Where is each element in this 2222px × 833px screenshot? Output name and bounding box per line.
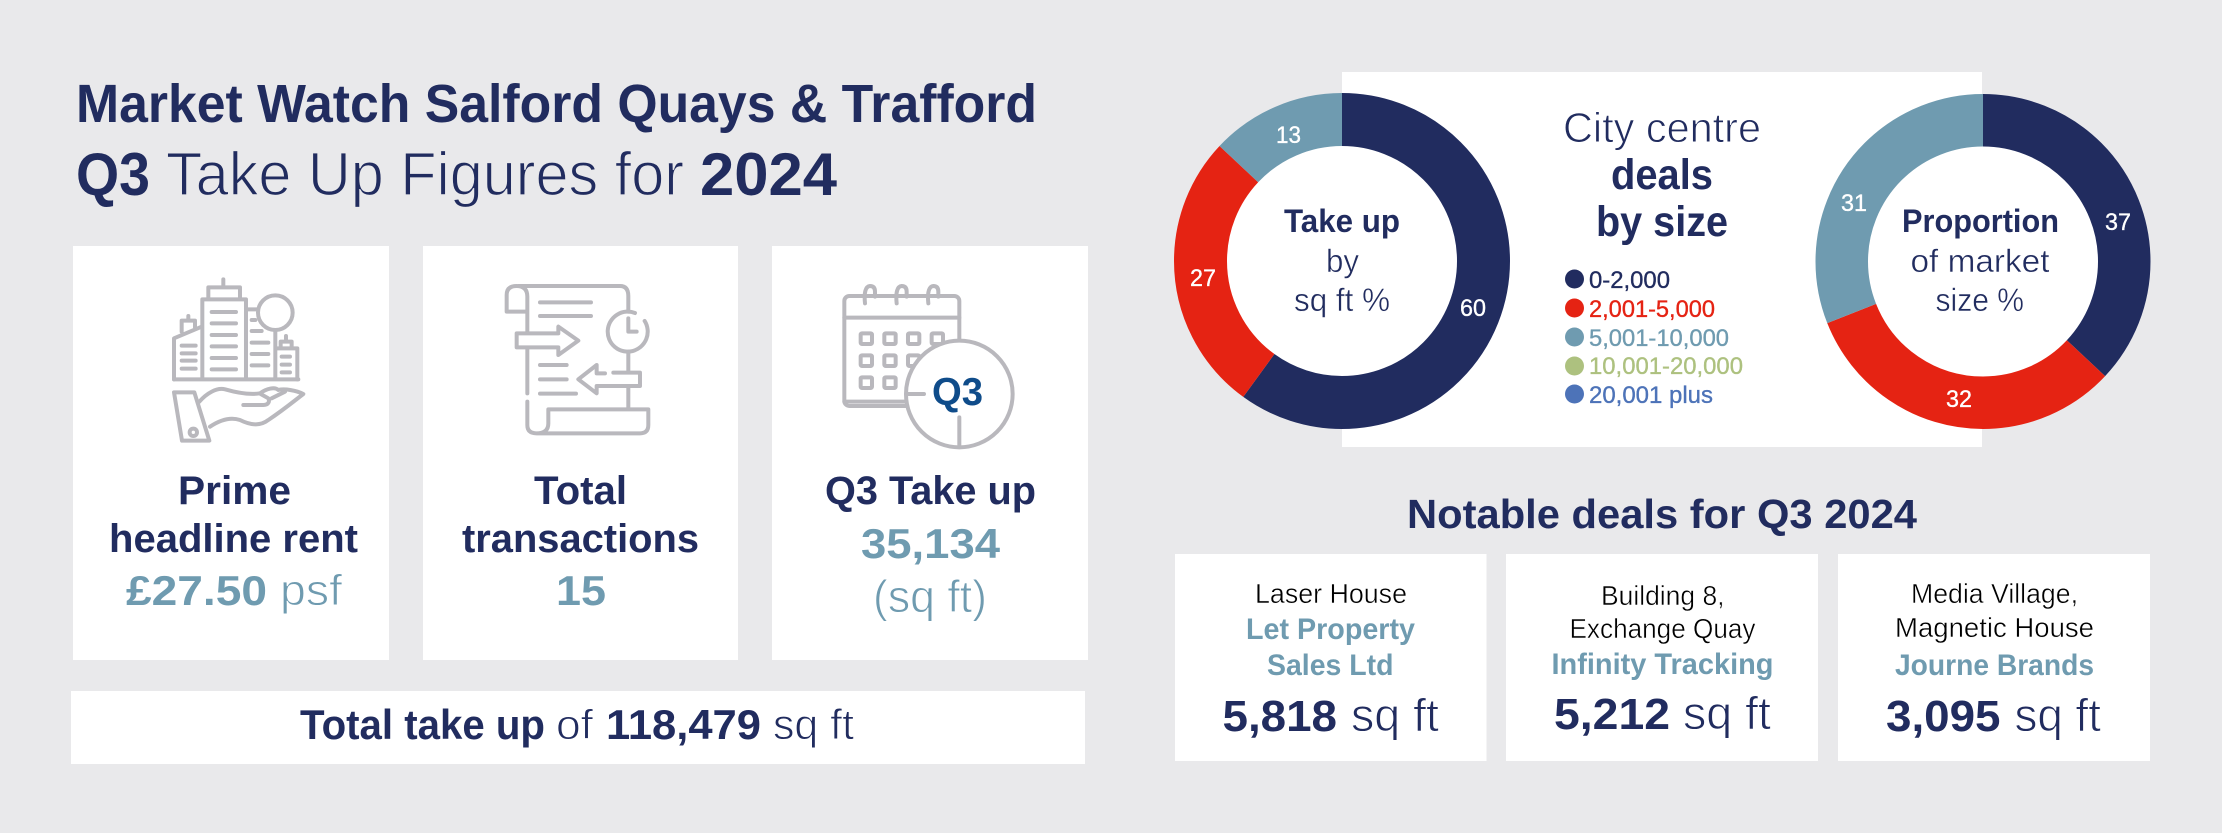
- total take up text: [300, 701, 854, 749]
- donut centre label: by: [1326, 243, 1359, 279]
- size: [1222, 689, 1439, 741]
- legend: 2,001-5,000: [1589, 296, 1715, 323]
- title: [76, 74, 1037, 208]
- value: £27.50 psf: psf: [280, 566, 343, 615]
- title line 2: Take Up Figures for: [166, 140, 684, 208]
- size: 5,212: [1554, 690, 1670, 739]
- donut centre label: of market: [1910, 243, 2050, 279]
- property name: Exchange Quay: [1570, 613, 1756, 644]
- tenant: Let Property: [1246, 613, 1415, 646]
- property name: [1570, 580, 1756, 644]
- size: sq ft: [2014, 689, 2101, 741]
- donut centre label: [1284, 203, 1400, 318]
- icon: calendar with Q3 clock: [844, 286, 1013, 447]
- title line 2: Q3: [76, 141, 150, 208]
- legend: 10,001-20,000: [1589, 353, 1743, 380]
- donut values: 60: [1460, 295, 1486, 322]
- label: prime headline rent: [109, 469, 358, 561]
- label: prime headline rent: headline rent: [109, 517, 358, 561]
- donut centre label: sq ft %: [1294, 282, 1390, 318]
- tenant: Infinity Tracking: [1552, 648, 1774, 681]
- value: 35,134 sq ft: 35,134: [861, 520, 1001, 567]
- size: [1554, 687, 1771, 739]
- donut values: 27: [1190, 265, 1216, 292]
- label: total transactions: [462, 469, 699, 561]
- donut chart: proportion of market size: [1841, 120, 2131, 413]
- heading: city centre deals by size: City centre: [1563, 104, 1761, 151]
- donut chart: take up by sq ft: [1190, 120, 1486, 402]
- panel: Q3 take up: [772, 246, 1088, 660]
- total take up text: 118,479: [606, 701, 761, 748]
- icon: city on a hand: [174, 279, 303, 441]
- deal card: Building 8, Exchange Quay: [1506, 554, 1818, 761]
- value: 35,134 sq ft: (sq ft): [873, 571, 987, 622]
- donut centre label: [1902, 203, 2059, 318]
- legend: 0-2,000: [1589, 267, 1670, 294]
- tenant: Journe Brands: [1895, 649, 2094, 682]
- total take up text: Total take up: [300, 701, 545, 748]
- property name: Laser House: [1255, 578, 1407, 609]
- tenant: [1246, 613, 1415, 682]
- deal card: Media Village, Magnetic House: [1838, 554, 2150, 761]
- total take up text: sq ft: [773, 701, 854, 749]
- donut centre label: size %: [1936, 282, 2024, 318]
- legend: 5,001-10,000: [1589, 325, 1729, 352]
- property name: [1895, 578, 2094, 643]
- donut values: [1841, 190, 2131, 413]
- heading: city centre deals by size: by size: [1596, 198, 1728, 246]
- property name: Media Village,: [1911, 578, 2078, 609]
- title line 2: 2024: [700, 141, 838, 208]
- size: [1886, 689, 2101, 741]
- panel: prime headline rent: [73, 246, 389, 660]
- heading: city centre deals by size: deals: [1611, 151, 1713, 199]
- property name: Building 8,: [1601, 580, 1724, 611]
- donut centre label: Take up: [1284, 203, 1400, 239]
- total take up text: of: [556, 701, 593, 748]
- size: 5,818: [1222, 692, 1337, 741]
- donut values: [1190, 122, 1486, 322]
- size: sq ft: [1351, 689, 1439, 741]
- label: total transactions: Total: [534, 469, 627, 513]
- donut values: 32: [1946, 386, 1972, 413]
- donut values: 13: [1276, 122, 1301, 149]
- size: sq ft: [1683, 687, 1771, 739]
- donut centre label: Proportion: [1902, 203, 2059, 239]
- deal card: Laser House: [1175, 554, 1486, 761]
- value: 35,134 sq ft: [861, 520, 1001, 622]
- label: total transactions: transactions: [462, 517, 699, 561]
- tenant: Sales Ltd: [1267, 649, 1394, 682]
- value: £27.50 psf: £27.50: [126, 567, 267, 614]
- donut values: 37: [2105, 209, 2131, 236]
- donut values: 31: [1841, 190, 1867, 217]
- title line 2: [76, 140, 838, 208]
- panel: city centre deals by size: [1342, 72, 1982, 447]
- icon: calendar with Q3 clock: Q3: [932, 371, 983, 414]
- value: 15: 15: [556, 567, 606, 614]
- heading: notable deals: Notable deals for Q3 2024: [1407, 491, 1917, 537]
- title line 1: Market Watch Salford Quays & Trafford: [76, 74, 1037, 134]
- panel: total transactions: [423, 246, 738, 660]
- panel: total take up bar: [71, 691, 1085, 764]
- legend: 20,001 plus: [1589, 382, 1713, 409]
- size: 3,095: [1886, 692, 2000, 741]
- label: Q3 take up: Q3 Take up: [825, 469, 1036, 513]
- heading: city centre deals by size: [1563, 104, 1761, 246]
- label: prime headline rent: Prime: [178, 469, 291, 513]
- value: £27.50 psf: [126, 566, 343, 615]
- legend: [1565, 267, 1743, 409]
- property name: Magnetic House: [1895, 612, 2094, 643]
- icon: document scroll with arrows and clock: [507, 286, 648, 433]
